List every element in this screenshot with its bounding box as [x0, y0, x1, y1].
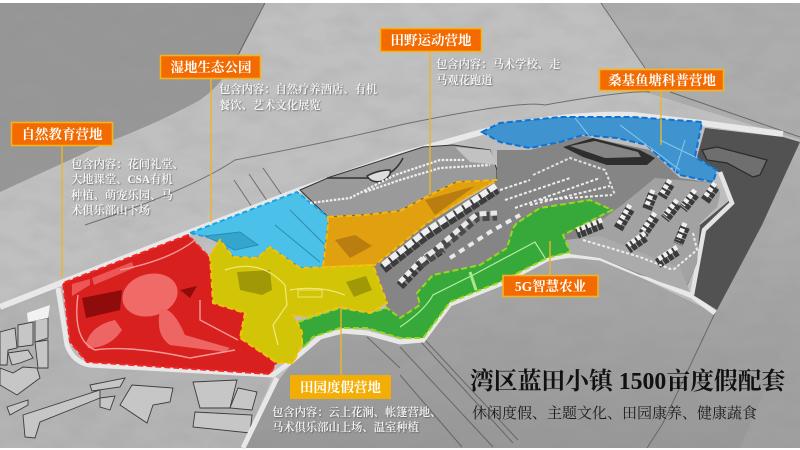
region: cyan wetland park [190, 192, 328, 268]
hill east [702, 147, 767, 177]
buildings east towers [577, 180, 715, 270]
parcel: white block [27, 305, 50, 322]
description: 田园度假营地: 包含内容：云上花涧、帐篷营地、 [272, 405, 441, 419]
label: 田园度假营地 [290, 375, 391, 399]
terrain city block centre [373, 136, 720, 320]
road: east branch [692, 172, 732, 295]
terrain city south slope [565, 236, 690, 292]
terrain west hill [300, 145, 497, 217]
region: blue mulberry fish pond camp [482, 117, 717, 182]
main title: 湾区蓝田小镇 1500亩度假配套 [470, 367, 786, 395]
description: 湿地生态公园: 餐饮、艺术文化展览 [219, 98, 321, 112]
description: 自然教育营地: 种植、萌宠乐园、马 [71, 188, 173, 202]
description: 田野运动营地: 包含内容：马术学校、走 [436, 57, 560, 71]
dark ground east [693, 128, 800, 310]
label: 自然教育营地: 自然教育营地 [22, 126, 103, 142]
buildings west towers [383, 158, 615, 286]
region: yellow countryside resort camp [210, 240, 387, 363]
subtitle: 休闲度假、主题文化、田园康养、健康蔬食 [472, 404, 757, 422]
road: upper road [0, 115, 783, 307]
background: lower-right pale strip [740, 190, 800, 448]
description: 田园度假营地: 马术俱乐部山上场、温室种植 [272, 420, 420, 434]
description: 自然教育营地: 大地课堂、CSA有机 [71, 172, 173, 186]
terrain city east slab [575, 178, 720, 285]
terrain: pale plots [455, 147, 497, 165]
region: orange field sports camp [323, 180, 497, 267]
label: 湿地生态公园 [160, 56, 260, 78]
road: south branch [243, 378, 277, 448]
label: 自然教育营地 [12, 122, 112, 146]
lake island [367, 170, 390, 182]
description: 自然教育营地: 术俱乐部山下场 [71, 203, 150, 217]
label: 田野运动营地 [380, 28, 482, 52]
region: red natural education camp [63, 235, 276, 374]
hill centre top [570, 141, 641, 158]
description: 田野运动营地: 马观花跑道 [436, 73, 492, 87]
parcels lower left [0, 318, 257, 438]
label: 桑基鱼塘科普营地: 桑基鱼塘科普营地 [608, 72, 716, 88]
terrain: ridge stream [327, 158, 403, 178]
connector lines [62, 52, 661, 375]
label: 5G智慧农业 [503, 276, 598, 296]
road: lower road [58, 255, 715, 375]
background: lower-left field [0, 288, 273, 448]
background: lower field [243, 140, 800, 448]
background: top-right field [601, 3, 800, 140]
description: 自然教育营地: 包含内容：花间礼堂、 [71, 157, 184, 171]
label: 湿地生态公园: 湿地生态公园 [170, 59, 252, 75]
label: 桑基鱼塘科普营地 [600, 70, 724, 90]
description: 湿地生态公园: 包含内容：自然疗养酒店、有机 [219, 82, 378, 96]
label: 田园度假营地: 田园度假营地 [300, 379, 381, 395]
buildings west hill rows [310, 160, 490, 203]
label: 田野运动营地: 田野运动营地 [390, 32, 472, 48]
hill centre [563, 138, 655, 165]
background: dark top-left wedge [0, 3, 265, 192]
label: 5G智慧农业: 5G智慧农业 [515, 278, 587, 294]
region: green 5G agriculture [298, 200, 612, 348]
